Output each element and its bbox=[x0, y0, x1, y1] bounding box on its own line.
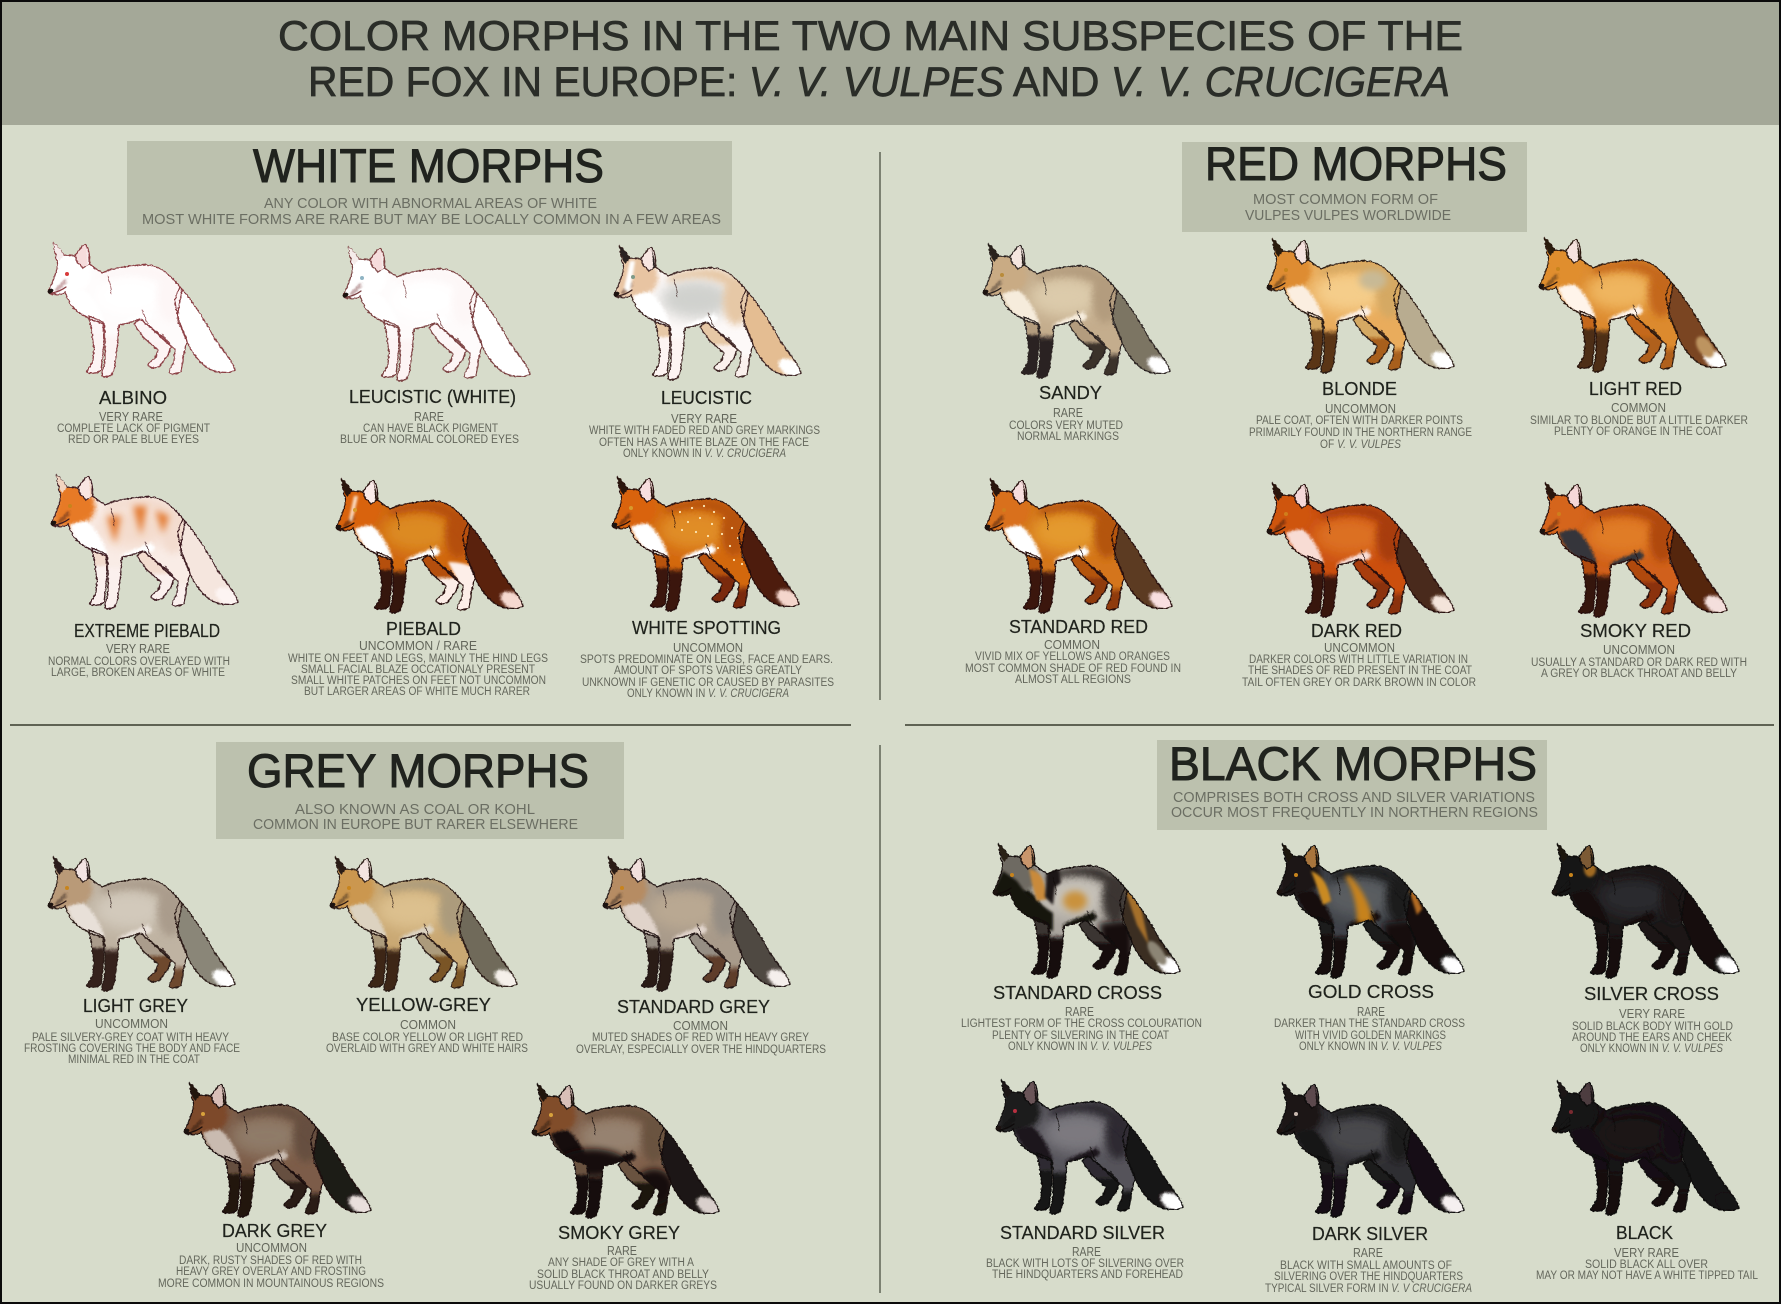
card: standard silver: THE HINDQUARTERS AND FOREHEAD bbox=[992, 1269, 1183, 1281]
card: albino: RED OR PALE BLUE EYES bbox=[68, 434, 199, 446]
card: standard cross bbox=[961, 843, 1202, 1053]
card: yellow-grey: OVERLAID WITH GREY AND WHITE HAIRS bbox=[326, 1043, 528, 1055]
card: light grey: LIGHT GREY bbox=[83, 996, 188, 1016]
card: smoky red bbox=[1531, 482, 1747, 680]
card: smoky grey: ANY SHADE OF GREY WITH A bbox=[548, 1257, 694, 1269]
card: smoky red: USUALLY A STANDARD OR DARK RED WITH bbox=[1531, 657, 1747, 669]
card: standard red: ALMOST ALL REGIONS bbox=[1015, 674, 1131, 686]
card: standard grey: COMMON bbox=[673, 1018, 728, 1033]
fox: gold cross bbox=[1276, 843, 1472, 982]
heading: red morphs: VULPES VULPES WORLDWIDE bbox=[1245, 208, 1451, 224]
card: silver cross bbox=[1552, 843, 1747, 1055]
card: standard cross: LIGHTEST FORM OF THE CROSS COLOURATION bbox=[961, 1018, 1202, 1030]
card: standard cross: PLENTY OF SILVERING IN THE COAT bbox=[992, 1030, 1169, 1042]
heading: grey morphs bbox=[216, 742, 624, 839]
card: leucistic: LEUCISTIC bbox=[661, 388, 752, 408]
card: dark grey: MORE COMMON IN MOUNTAINOUS REGIONS bbox=[158, 1278, 384, 1290]
card: black: BLACK bbox=[1616, 1223, 1673, 1243]
card: yellow-grey: YELLOW-GREY bbox=[356, 995, 491, 1015]
card: gold cross bbox=[1274, 843, 1472, 1053]
heading: black morphs bbox=[1157, 737, 1547, 830]
card: black: SOLID BLACK ALL OVER bbox=[1585, 1259, 1708, 1271]
card: yellow-grey bbox=[326, 856, 528, 1055]
card: albino: ALBINO bbox=[99, 388, 167, 408]
card: dark silver: TYPICAL SILVER FORM IN V. V CRUCIGERA bbox=[1265, 1283, 1472, 1295]
heading: black morphs: BLACK MORPHS bbox=[1169, 737, 1537, 790]
card: light red: COMMON bbox=[1611, 400, 1666, 415]
fox: standard silver bbox=[996, 1079, 1191, 1218]
card: light red: PLENTY OF ORANGE IN THE COAT bbox=[1554, 426, 1723, 438]
fox: dark grey bbox=[184, 1082, 379, 1221]
card: dark silver: SILVERING OVER THE HINDQUARTERS bbox=[1274, 1271, 1463, 1283]
card: blonde bbox=[1249, 238, 1472, 451]
card: standard silver: RARE bbox=[1072, 1244, 1101, 1259]
card: blonde: UNCOMMON bbox=[1325, 401, 1396, 416]
fox: light red bbox=[1538, 237, 1734, 376]
card: white spotting: AMOUNT OF SPOTS VARIES GREATLY bbox=[614, 665, 802, 677]
card: smoky red: A GREY OR BLACK THROAT AND BELLY bbox=[1541, 668, 1737, 680]
fox: smoky grey bbox=[532, 1083, 727, 1222]
card: sandy: COLORS VERY MUTED bbox=[1009, 420, 1123, 432]
card: standard red: MOST COMMON SHADE OF RED FOUND IN bbox=[965, 663, 1181, 675]
card: albino bbox=[48, 242, 243, 446]
heading: white morphs: MOST WHITE FORMS ARE RARE BUT MAY BE LOCALLY COMMON IN A FEW AREAS bbox=[142, 212, 721, 228]
card: dark red: DARKER COLORS WITH LITTLE VARIATION IN bbox=[1249, 654, 1468, 666]
card: standard red bbox=[965, 478, 1181, 686]
card: leucistic white bbox=[340, 246, 538, 446]
card: dark grey: DARK, RUSTY SHADES OF RED WITH bbox=[179, 1255, 362, 1267]
card: smoky grey: USUALLY FOUND ON DARKER GREYS bbox=[529, 1280, 717, 1292]
card: black: VERY RARE bbox=[1614, 1245, 1679, 1260]
card: dark red bbox=[1242, 482, 1476, 689]
card: extreme piebald: EXTREME PIEBALD bbox=[74, 621, 220, 641]
heading: grey morphs: ALSO KNOWN AS COAL OR KOHL bbox=[295, 802, 535, 818]
title banner bbox=[0, 0, 1781, 125]
card: piebald: WHITE ON FEET AND LEGS, MAINLY THE HIND LEGS bbox=[288, 653, 548, 665]
card: piebald bbox=[288, 478, 548, 698]
card: white spotting: UNCOMMON bbox=[673, 640, 743, 655]
card: dark red: DARK RED bbox=[1311, 621, 1402, 641]
card: extreme piebald: VERY RARE bbox=[106, 641, 170, 656]
card: gold cross: DARKER THAN THE STANDARD CROSS bbox=[1274, 1018, 1465, 1030]
card: dark grey: UNCOMMON bbox=[236, 1240, 307, 1255]
card: dark grey bbox=[158, 1082, 384, 1290]
card: light red: SIMILAR TO BLONDE BUT A LITTLE DARKER bbox=[1530, 415, 1748, 427]
card: gold cross: ONLY KNOWN IN V. V. VULPES bbox=[1299, 1041, 1442, 1053]
card: standard cross: STANDARD CROSS bbox=[993, 983, 1162, 1003]
card: gold cross: WITH VIVID GOLDEN MARKINGS bbox=[1295, 1030, 1446, 1042]
card: standard silver: BLACK WITH LOTS OF SILVERING OVER bbox=[986, 1258, 1184, 1270]
card: standard silver: STANDARD SILVER bbox=[1000, 1223, 1165, 1243]
heading: black morphs: COMPRISES BOTH CROSS AND SILVER VARIATIONS bbox=[1173, 790, 1535, 806]
card: standard grey: MUTED SHADES OF RED WITH HEAVY GREY bbox=[592, 1032, 809, 1044]
card: smoky red: UNCOMMON bbox=[1603, 642, 1675, 657]
card: standard red: VIVID MIX OF YELLOWS AND ORANGES bbox=[975, 651, 1170, 663]
card: leucistic: ONLY KNOWN IN V. V. CRUCIGERA bbox=[623, 448, 786, 460]
card: silver cross: VERY RARE bbox=[1619, 1006, 1685, 1021]
fox: white spotting bbox=[612, 476, 807, 615]
card: standard red: STANDARD RED bbox=[1009, 617, 1148, 637]
card: silver cross: AROUND THE EARS AND CHEEK bbox=[1572, 1032, 1732, 1044]
heading: white morphs: WHITE MORPHS bbox=[253, 139, 604, 192]
card: piebald: SMALL WHITE PATCHES ON FEET NOT UNCOMMON bbox=[291, 675, 546, 687]
fox: standard cross bbox=[991, 843, 1188, 982]
card: white spotting: ONLY KNOWN IN V. V. CRUCIGERA bbox=[627, 688, 789, 700]
card: black bbox=[1536, 1080, 1759, 1282]
card: smoky red: SMOKY RED bbox=[1580, 621, 1691, 641]
card: dark silver bbox=[1265, 1082, 1472, 1295]
card: leucistic: WHITE WITH FADED RED AND GREY MARKINGS bbox=[589, 425, 820, 437]
card: albino: COMPLETE LACK OF PIGMENT bbox=[57, 423, 210, 435]
fox: leucistic white bbox=[342, 246, 538, 385]
card: white spotting: WHITE SPOTTING bbox=[632, 618, 781, 638]
card: light red bbox=[1530, 237, 1748, 438]
card: light red: LIGHT RED bbox=[1589, 379, 1682, 399]
card: leucistic: VERY RARE bbox=[671, 411, 737, 426]
fox: standard red bbox=[984, 478, 1180, 617]
fox: light grey bbox=[48, 856, 243, 995]
card: piebald: PIEBALD bbox=[386, 619, 461, 639]
card: blonde: OF V. V. VULPES bbox=[1320, 439, 1401, 451]
card: leucistic white: LEUCISTIC (WHITE) bbox=[349, 387, 516, 407]
card: smoky grey bbox=[529, 1083, 727, 1292]
card: white spotting: UNKNOWN IF GENETIC OR CAUSED BY PARASITES bbox=[582, 677, 834, 689]
card: sandy: SANDY bbox=[1039, 383, 1102, 403]
card: standard cross: RARE bbox=[1065, 1004, 1094, 1019]
card: dark silver: DARK SILVER bbox=[1312, 1224, 1428, 1244]
card: leucistic bbox=[589, 245, 820, 460]
card: smoky grey: RARE bbox=[607, 1243, 637, 1258]
card: standard red: COMMON bbox=[1044, 637, 1100, 652]
card: standard grey: STANDARD GREY bbox=[617, 997, 770, 1017]
card: dark grey: HEAVY GREY OVERLAY AND FROSTING bbox=[176, 1266, 366, 1278]
card: leucistic white: RARE bbox=[414, 409, 444, 424]
title text bbox=[278, 12, 1463, 105]
card: blonde: PALE COAT, OFTEN WITH DARKER POINTS bbox=[1256, 415, 1463, 427]
fox: standard grey bbox=[602, 856, 798, 995]
card: dark red: THE SHADES OF RED PRESENT IN THE COAT bbox=[1248, 665, 1472, 677]
panel: grey morphs bbox=[24, 742, 826, 1292]
fox: albino bbox=[48, 242, 243, 381]
card: yellow-grey: BASE COLOR YELLOW OR LIGHT RED bbox=[332, 1032, 523, 1044]
card: sandy: RARE bbox=[1053, 405, 1083, 420]
card: blonde: BLONDE bbox=[1322, 379, 1397, 399]
card: white spotting bbox=[580, 476, 834, 700]
fox: blonde bbox=[1266, 238, 1462, 377]
fox: dark red bbox=[1266, 482, 1462, 621]
card: smoky grey: SOLID BLACK THROAT AND BELLY bbox=[537, 1269, 709, 1281]
card: leucistic: OFTEN HAS A WHITE BLAZE ON THE FACE bbox=[599, 437, 809, 449]
card: light grey: MINIMAL RED IN THE COAT bbox=[68, 1054, 200, 1066]
panel: white morphs bbox=[48, 139, 834, 700]
heading: white morphs: ANY COLOR WITH ABNORMAL AREAS OF WHITE bbox=[264, 196, 597, 212]
heading: red morphs: RED MORPHS bbox=[1205, 137, 1507, 190]
card: white spotting: SPOTS PREDOMINATE ON LEGS, FACE AND EARS. bbox=[580, 654, 833, 666]
heading: red morphs bbox=[1182, 137, 1527, 232]
card: piebald: SMALL FACIAL BLAZE OCCATIONALY PRESENT bbox=[301, 664, 535, 676]
card: silver cross: SILVER CROSS bbox=[1584, 984, 1719, 1004]
card: silver cross: ONLY KNOWN IN V. V. VULPES bbox=[1580, 1043, 1723, 1055]
card: standard grey: OVERLAY, ESPECIALLY OVER THE HINDQUARTERS bbox=[576, 1044, 826, 1056]
card: gold cross: RARE bbox=[1357, 1004, 1385, 1019]
heading: red morphs: MOST COMMON FORM OF bbox=[1253, 192, 1438, 208]
card: light grey: UNCOMMON bbox=[95, 1016, 168, 1031]
fox: silver cross bbox=[1552, 843, 1747, 982]
fox: smoky red bbox=[1540, 482, 1735, 621]
card: leucistic white: BLUE OR NORMAL COLORED EYES bbox=[340, 434, 519, 446]
card: dark silver: RARE bbox=[1353, 1245, 1383, 1260]
fox: piebald bbox=[336, 478, 531, 617]
card: silver cross: SOLID BLACK BODY WITH GOLD bbox=[1572, 1021, 1733, 1033]
heading: grey morphs: COMMON IN EUROPE BUT RARER ELSEWHERE bbox=[253, 817, 578, 833]
card: piebald: BUT LARGER AREAS OF WHITE MUCH RARER bbox=[304, 686, 530, 698]
card: extreme piebald bbox=[48, 474, 246, 679]
title text: COLOR MORPHS IN THE TWO MAIN SUBSPECIES OF THE bbox=[278, 12, 1463, 59]
card: light grey: PALE SILVERY-GREY COAT WITH HEAVY bbox=[32, 1032, 229, 1044]
heading: grey morphs: GREY MORPHS bbox=[247, 744, 589, 797]
fox: sandy bbox=[982, 243, 1178, 382]
title text: RED FOX IN EUROPE: V. V. VULPES AND V. V. CRUCIGERA bbox=[308, 58, 1450, 105]
fox: extreme piebald bbox=[50, 474, 246, 613]
card: light grey: FROSTING COVERING THE BODY AND FACE bbox=[24, 1043, 240, 1055]
fox: dark silver bbox=[1276, 1082, 1472, 1221]
fox: black bbox=[1552, 1080, 1747, 1219]
heading: black morphs: OCCUR MOST FREQUENTLY IN NORTHERN REGIONS bbox=[1171, 805, 1538, 821]
card: dark red: TAIL OFTEN GREY OR DARK BROWN IN COLOR bbox=[1242, 677, 1476, 689]
card: sandy: NORMAL MARKINGS bbox=[1017, 431, 1119, 443]
card: piebald: UNCOMMON / RARE bbox=[359, 638, 477, 653]
panel: black morphs bbox=[961, 737, 1759, 1295]
fox: leucistic bbox=[614, 245, 809, 384]
card: extreme piebald: NORMAL COLORS OVERLAYED WITH bbox=[48, 656, 230, 668]
card: standard grey bbox=[576, 856, 826, 1056]
card: gold cross: GOLD CROSS bbox=[1308, 982, 1434, 1002]
card: standard cross: ONLY KNOWN IN V. V. VULPES bbox=[1008, 1041, 1152, 1053]
card: dark grey: DARK GREY bbox=[222, 1221, 327, 1241]
card: yellow-grey: COMMON bbox=[400, 1017, 456, 1032]
card: leucistic white: CAN HAVE BLACK PIGMENT bbox=[363, 423, 498, 435]
card: light grey bbox=[24, 856, 243, 1066]
card: smoky grey: SMOKY GREY bbox=[558, 1223, 680, 1243]
card: standard silver bbox=[986, 1079, 1191, 1281]
heading: white morphs bbox=[127, 139, 732, 235]
card: albino: VERY RARE bbox=[99, 409, 163, 424]
fox: yellow-grey bbox=[330, 856, 525, 995]
card: sandy bbox=[982, 243, 1178, 443]
panel: red morphs bbox=[965, 137, 1748, 689]
card: blonde: PRIMARILY FOUND IN THE NORTHERN RANGE bbox=[1249, 427, 1472, 439]
card: dark red: UNCOMMON bbox=[1324, 640, 1395, 655]
card: dark silver: BLACK WITH SMALL AMOUNTS OF bbox=[1280, 1260, 1452, 1272]
card: extreme piebald: LARGE, BROKEN AREAS OF WHITE bbox=[51, 667, 225, 679]
